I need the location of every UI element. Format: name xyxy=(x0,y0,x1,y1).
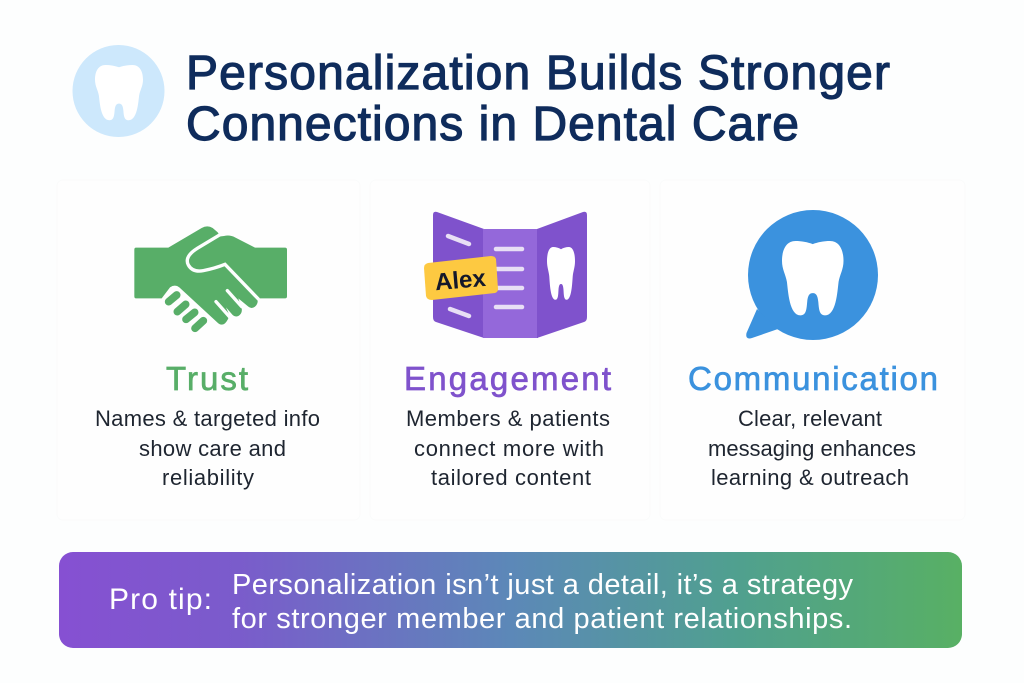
text: trust description: Names & targeted info xyxy=(95,406,320,431)
text: engagement description: connect more with xyxy=(414,436,604,461)
text: communication description xyxy=(708,406,916,490)
text: trust description xyxy=(95,406,320,490)
title: Personalization Builds Stronger xyxy=(186,47,890,100)
header icon: tooth in circle xyxy=(72,45,164,137)
heading: communication: Communication xyxy=(688,360,938,397)
callout: pro tip xyxy=(59,552,962,648)
panel: engagement xyxy=(370,180,650,520)
name tag: Alex xyxy=(424,256,498,300)
icon: speech bubble with tooth xyxy=(746,210,878,340)
text: engagement description xyxy=(406,406,610,490)
icon: brochure xyxy=(424,212,587,338)
text: trust description: show care and xyxy=(139,436,286,461)
text: communication description: messaging enhances xyxy=(708,436,916,461)
text: engagement description: Members & patients xyxy=(406,406,610,431)
name tag: Alex: Alex xyxy=(434,265,488,296)
title xyxy=(186,47,890,151)
text: trust description: reliability xyxy=(162,465,254,490)
text: engagement description: tailored content xyxy=(431,465,591,490)
title: Connections in Dental Care xyxy=(186,98,799,151)
text: pro tip message: Personalization isn’t just a detail, it’s a strategy xyxy=(232,569,854,601)
heading: engagement: Engagement xyxy=(404,360,611,397)
text: pro tip message: for stronger member and patient relationships. xyxy=(232,603,852,635)
icon: handshake xyxy=(134,226,287,328)
panel: communication xyxy=(660,180,965,520)
panel: trust xyxy=(57,180,360,520)
label: pro tip: Pro tip: xyxy=(109,583,212,616)
heading: trust: Trust xyxy=(166,360,248,397)
text: communication description: learning & outreach xyxy=(711,465,909,490)
text: communication description: Clear, relevant xyxy=(738,406,882,431)
text: pro tip message xyxy=(232,569,854,635)
